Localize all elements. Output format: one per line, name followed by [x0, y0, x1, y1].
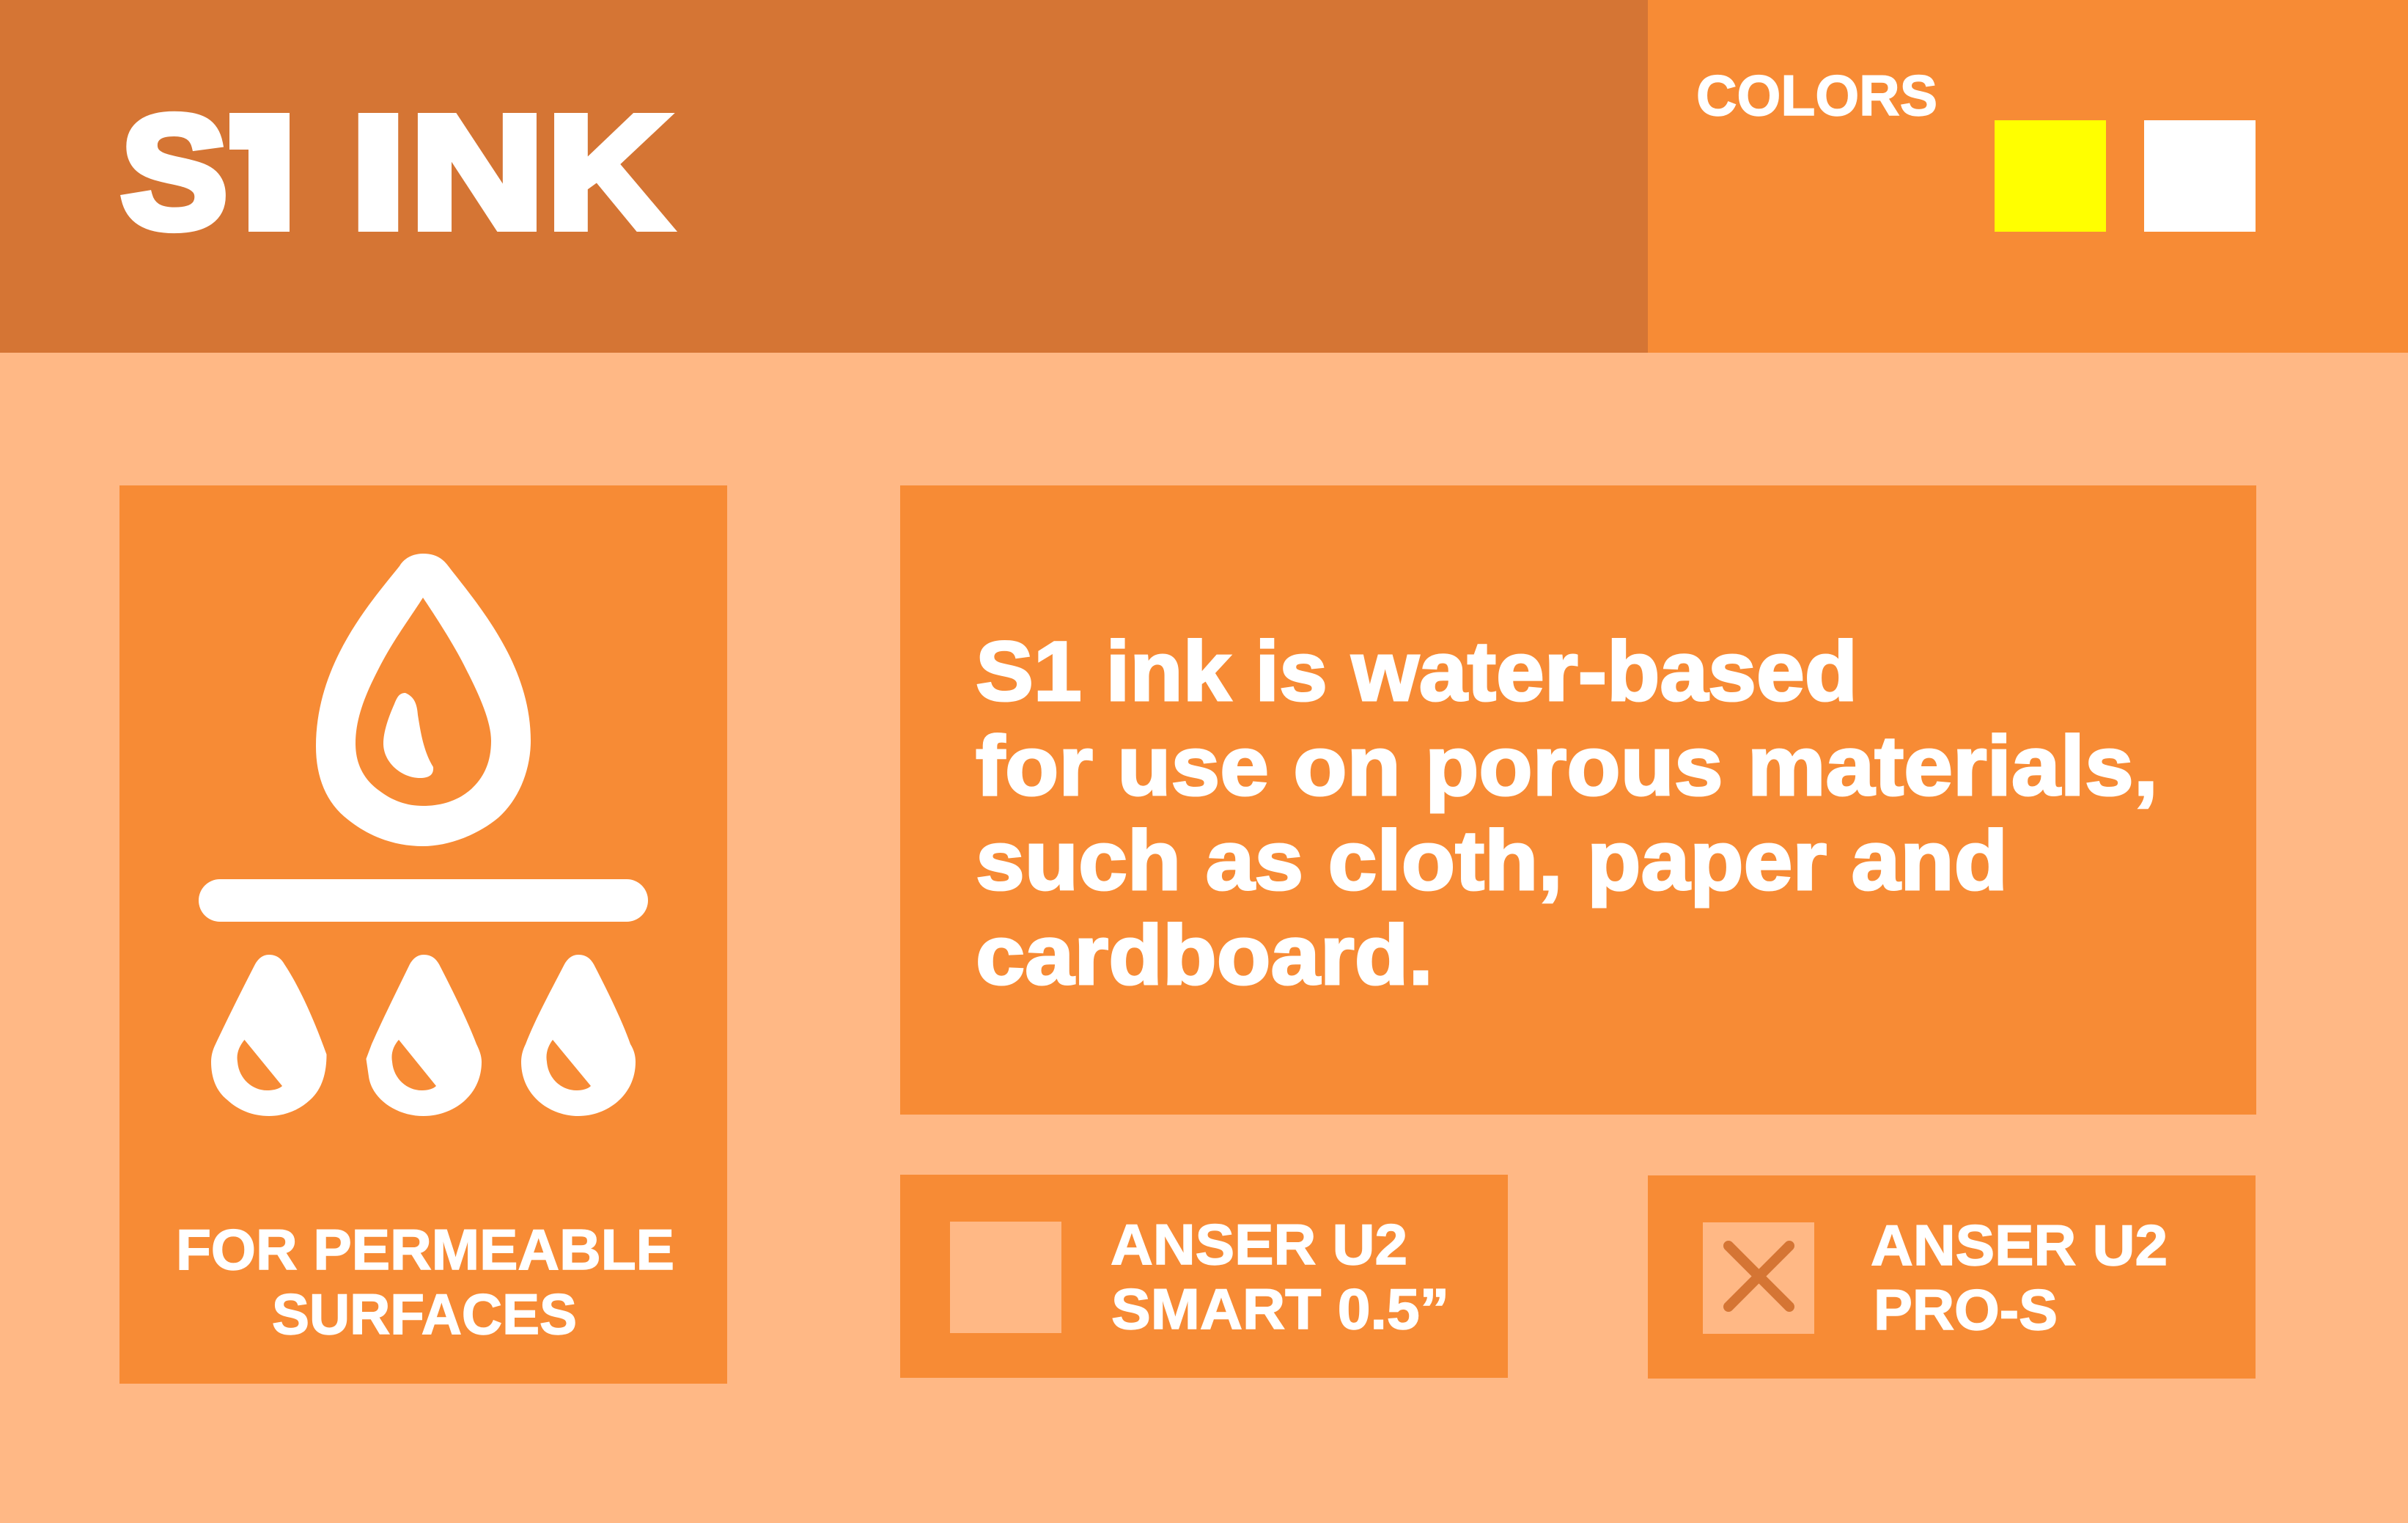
title: 1: [220, 84, 309, 262]
header band: title: [0, 0, 1648, 353]
title: [120, 111, 677, 233]
icon: cross mark: [1728, 1246, 1789, 1307]
panel: permeable surfaces: [119, 485, 727, 1384]
swatch: white: [2144, 120, 2256, 232]
title: N: [410, 84, 544, 262]
printer label: [1111, 1212, 1449, 1341]
icon: drop left: [211, 955, 327, 1116]
description text: [976, 625, 2158, 1002]
description text: cardboard.: [976, 909, 1433, 1002]
description text: such as cloth, paper and: [976, 814, 2008, 908]
panel: description: [900, 485, 2256, 1115]
icon: drop middle: [367, 955, 482, 1116]
printer label: ANSER U2: [1111, 1212, 1407, 1277]
panel: compatible printer: [900, 1175, 1508, 1378]
colors heading: COLORS: [1696, 63, 1937, 128]
description text: for use on porous materials,: [976, 719, 2158, 813]
title: S: [121, 84, 227, 262]
title: I: [350, 84, 406, 262]
description text: S1 ink is water-based: [976, 625, 1857, 719]
printer label: SMART 0.5”: [1111, 1277, 1449, 1341]
title: K: [548, 84, 669, 262]
checkbox: crossed: [1703, 1222, 1814, 1334]
icon: surface bar: [199, 879, 648, 922]
panel caption: [176, 1217, 674, 1346]
printer label: [1871, 1213, 2168, 1342]
icon: large ink drop: [316, 554, 531, 846]
header band: colors: [1648, 0, 2408, 353]
checkbox: empty: [950, 1222, 1061, 1333]
swatch: yellow: [1995, 120, 2106, 232]
panel caption: SURFACES: [272, 1282, 577, 1346]
printer label: PRO-S: [1874, 1277, 2058, 1342]
icon: drop right: [521, 955, 636, 1116]
panel caption: FOR PERMEABLE: [176, 1217, 674, 1282]
printer label: ANSER U2: [1871, 1213, 2168, 1277]
panel: incompatible printer: [1648, 1175, 2256, 1379]
